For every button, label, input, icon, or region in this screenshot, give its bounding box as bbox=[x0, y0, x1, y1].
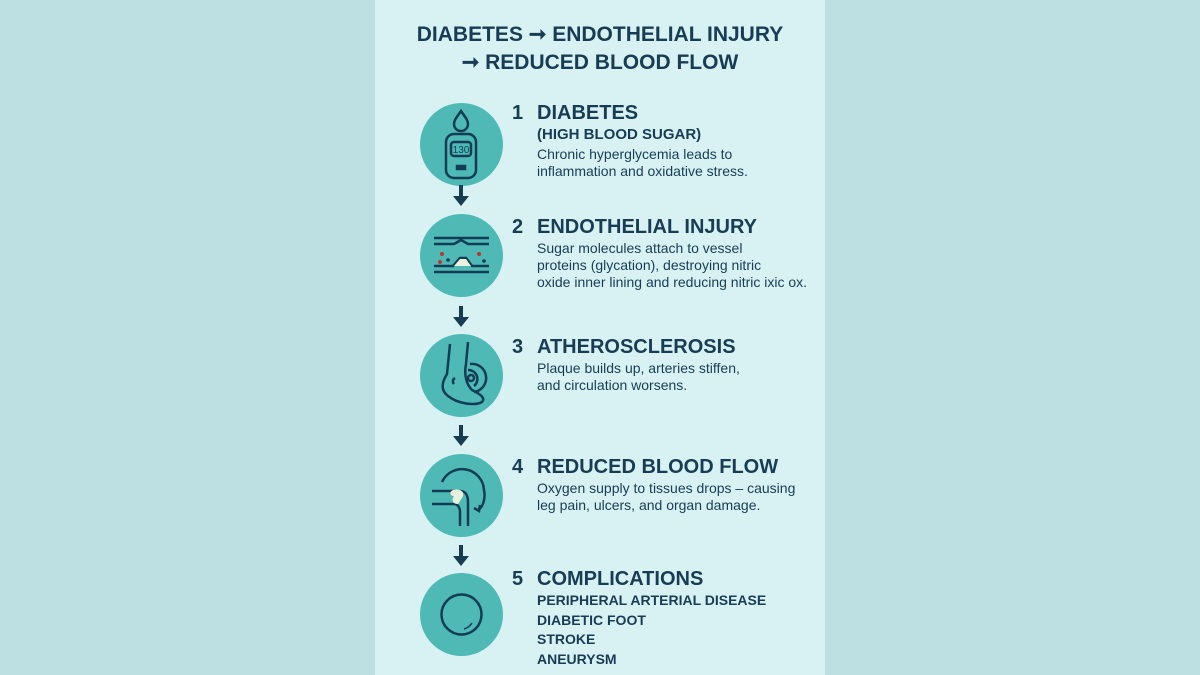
text: PERIPHERAL ARTERIAL DISEASE bbox=[537, 592, 766, 608]
text: Plaque builds up, arteries stiffen, bbox=[537, 360, 740, 376]
title: ➞ REDUCED BLOOD FLOW bbox=[462, 51, 738, 74]
icon: circle bbox=[420, 573, 503, 656]
arrow bbox=[453, 185, 469, 206]
step 4 text bbox=[512, 456, 795, 513]
text: 3 bbox=[512, 336, 523, 358]
text: DIABETES bbox=[537, 102, 638, 124]
text: REDUCED BLOOD FLOW bbox=[537, 456, 778, 478]
text: ATHEROSCLEROSIS bbox=[537, 336, 736, 358]
text: (HIGH BLOOD SUGAR) bbox=[537, 126, 701, 143]
icon: vessel bbox=[420, 214, 503, 297]
text: oxide inner lining and reducing nitric ixic ox. bbox=[537, 274, 807, 290]
step 2 text bbox=[512, 216, 807, 290]
title bbox=[417, 23, 783, 74]
text: STROKE bbox=[537, 631, 595, 647]
text: Chronic hyperglycemia leads to bbox=[537, 146, 732, 162]
text: 5 bbox=[512, 568, 523, 590]
text: inflammation and oxidative stress. bbox=[537, 163, 748, 179]
text: 1 bbox=[512, 102, 523, 124]
text: ENDOTHELIAL INJURY bbox=[537, 216, 757, 238]
title: DIABETES ➞ ENDOTHELIAL INJURY bbox=[417, 23, 783, 46]
icon: artery bend bbox=[420, 454, 503, 537]
icon: glucose meter: 130 bbox=[453, 145, 470, 156]
step 5 text bbox=[512, 568, 766, 667]
text: 4 bbox=[512, 456, 523, 478]
text: and circulation worsens. bbox=[537, 377, 687, 393]
icon: foot bbox=[420, 334, 503, 417]
text: Oxygen supply to tissues drops – causing bbox=[537, 480, 795, 496]
step 1 text bbox=[512, 102, 748, 179]
text: 2 bbox=[512, 216, 523, 238]
text: ANEURYSM bbox=[537, 651, 617, 667]
arrow bbox=[453, 545, 469, 566]
text: Sugar molecules attach to vessel bbox=[537, 240, 742, 256]
arrow bbox=[453, 306, 469, 327]
arrow bbox=[453, 425, 469, 446]
text: COMPLICATIONS bbox=[537, 568, 703, 590]
icon: glucose meter bbox=[420, 103, 503, 186]
text: DIABETIC FOOT bbox=[537, 612, 646, 628]
text: proteins (glycation), destroying nitric bbox=[537, 257, 761, 273]
step 3 text bbox=[512, 336, 740, 393]
panel: background bbox=[375, 0, 825, 675]
text: leg pain, ulcers, and organ damage. bbox=[537, 497, 760, 513]
